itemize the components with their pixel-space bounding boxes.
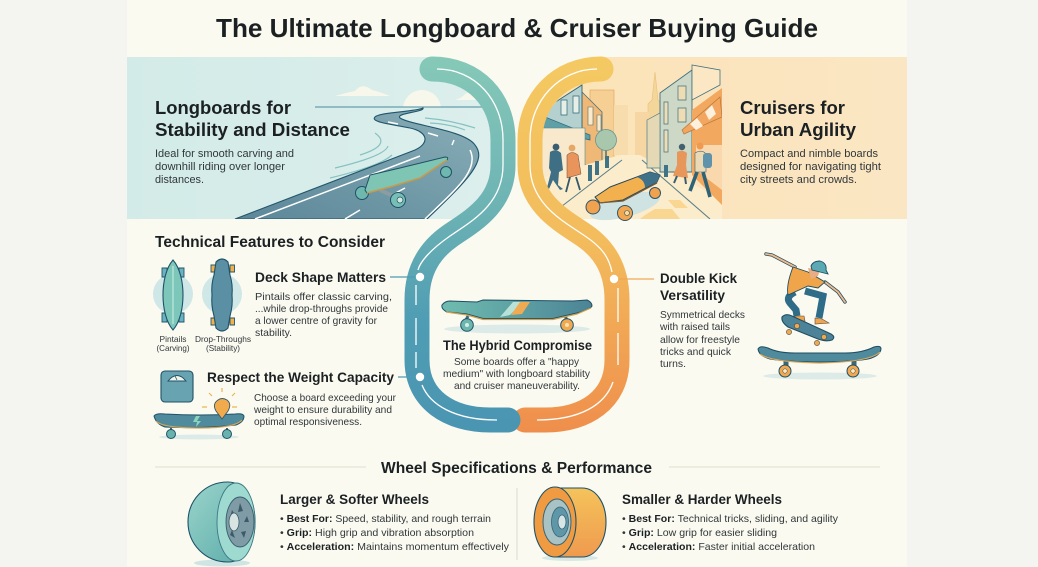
icon: scale [161,371,193,402]
heading: double kick: Versatility [660,287,725,303]
text: double kick [659,309,745,370]
heading: Stability and Distance [155,119,350,140]
label: drop-throughs [195,334,251,353]
divider [516,488,518,560]
text: deck shape: ...while drop-throughs provide [255,303,388,315]
heading [740,97,857,140]
panel: longboards [127,57,503,219]
illustration: hybrid board [442,300,592,334]
text: deck shape: stability. [255,327,292,339]
wheel text: smaller and harder: • Acceleration: Faster initial acceleration [622,541,815,553]
text: hybrid compromise: medium" with longboard stability [443,368,591,380]
track: left teal-blue [416,69,508,420]
text: double kick: tricks and quick [660,346,732,358]
skater arms [766,254,845,302]
label: pintails [156,334,190,353]
wheel text: larger and softer: • Best For: Speed, stability, and rough terrain [280,513,491,525]
skater shoes [795,316,829,324]
lower board [763,372,877,380]
wheel text: larger and softer: • Acceleration: Maintains momentum effectively [280,541,510,553]
wheel text: smaller and harder [622,491,839,553]
heading: Cruisers for [740,97,845,118]
track: right orange [525,69,618,420]
wheel text: smaller and harder: • Grip: Low grip for easier sliding [622,527,777,539]
section heading: technical features: Technical Features to Consider [155,234,385,251]
text: double kick: with raised tails [659,321,730,333]
heading: Urban Agility [740,119,857,140]
infographic canvas [127,18,907,566]
text: deck shape: a lower centre of gravity for [255,315,377,327]
text: weight capacity: optimal responsiveness. [254,416,362,428]
icon: drop-through deck [202,259,242,331]
icon: small orange wheel [534,487,606,561]
description: distances. [155,174,204,186]
description: downhill riding over longer [155,161,285,173]
label: pintails: Pintails [160,334,186,344]
title: The Ultimate Longboard & Cruiser Buying Guide [216,13,818,43]
text: weight capacity: weight to ensure durability and [253,404,392,416]
description: Ideal for smooth carving and [155,148,294,160]
connector: double kick [617,278,654,280]
text: deck shape [255,291,392,339]
track nodes [416,273,618,381]
connector: weight capacity [398,376,417,378]
road scene [235,86,484,219]
centre sheet [127,0,907,567]
longboard on road [356,157,452,208]
cruiser board [586,172,663,226]
skater shirt [788,267,825,295]
label: pintails: (Carving) [156,343,190,353]
wheel text: smaller and harder: • Best For: Technical tricks, sliding, and agility [622,513,839,525]
icon: loaded board with bulb [154,388,244,440]
wheel text: larger and softer [280,491,510,553]
heading [155,97,350,140]
description: Compact and nimble boards [740,148,878,160]
label: drop-throughs: (Stability) [206,343,240,353]
section heading: wheel specifications: Wheel Specifications & Performance [381,460,652,477]
panel background [127,57,503,219]
panel: cruisers [530,57,907,226]
wheel text: larger and softer: Larger & Softer Wheels [280,491,429,507]
label: drop-throughs: Drop-Throughs [195,334,251,344]
text: hybrid compromise: and cruiser maneuverability. [454,380,580,392]
text: weight capacity [253,392,396,428]
panel background [530,57,907,219]
description [740,148,881,186]
description [155,148,294,186]
wheel text: larger and softer: • Grip: High grip and vibration absorption [280,527,474,539]
text: hybrid compromise: Some boards offer a "happy [454,356,580,368]
text: double kick: Symmetrical decks [660,309,745,321]
heading: hybrid compromise: The Hybrid Compromise [443,338,592,353]
text: hybrid compromise [443,356,591,392]
description: designed for navigating tight [740,161,881,173]
skater legs [788,291,823,318]
illustration: skater doing a trick [758,254,881,380]
text: deck shape: Pintails offer classic carving, [255,291,392,303]
tilted board [782,315,834,341]
icon: large teal wheel [188,482,255,566]
connector: deck shape [390,276,417,278]
icon: pintail deck [153,260,193,330]
text: weight capacity: Choose a board exceeding your [254,392,396,404]
heading: double kick: Double Kick [660,270,737,286]
text: double kick: turns. [660,358,686,370]
heading: deck shape: Deck Shape Matters [255,269,386,285]
description: city streets and crowds. [740,174,857,186]
skater head [808,268,820,279]
text: double kick: allow for freestyle [660,334,740,346]
heading: weight capacity: Respect the Weight Capacity [207,369,394,385]
heading: Longboards for [155,97,291,118]
wheel text: smaller and harder: Smaller & Harder Wheels [622,491,782,507]
city scene [540,65,722,219]
heading: double kick [660,270,737,303]
skater cap [811,261,828,274]
